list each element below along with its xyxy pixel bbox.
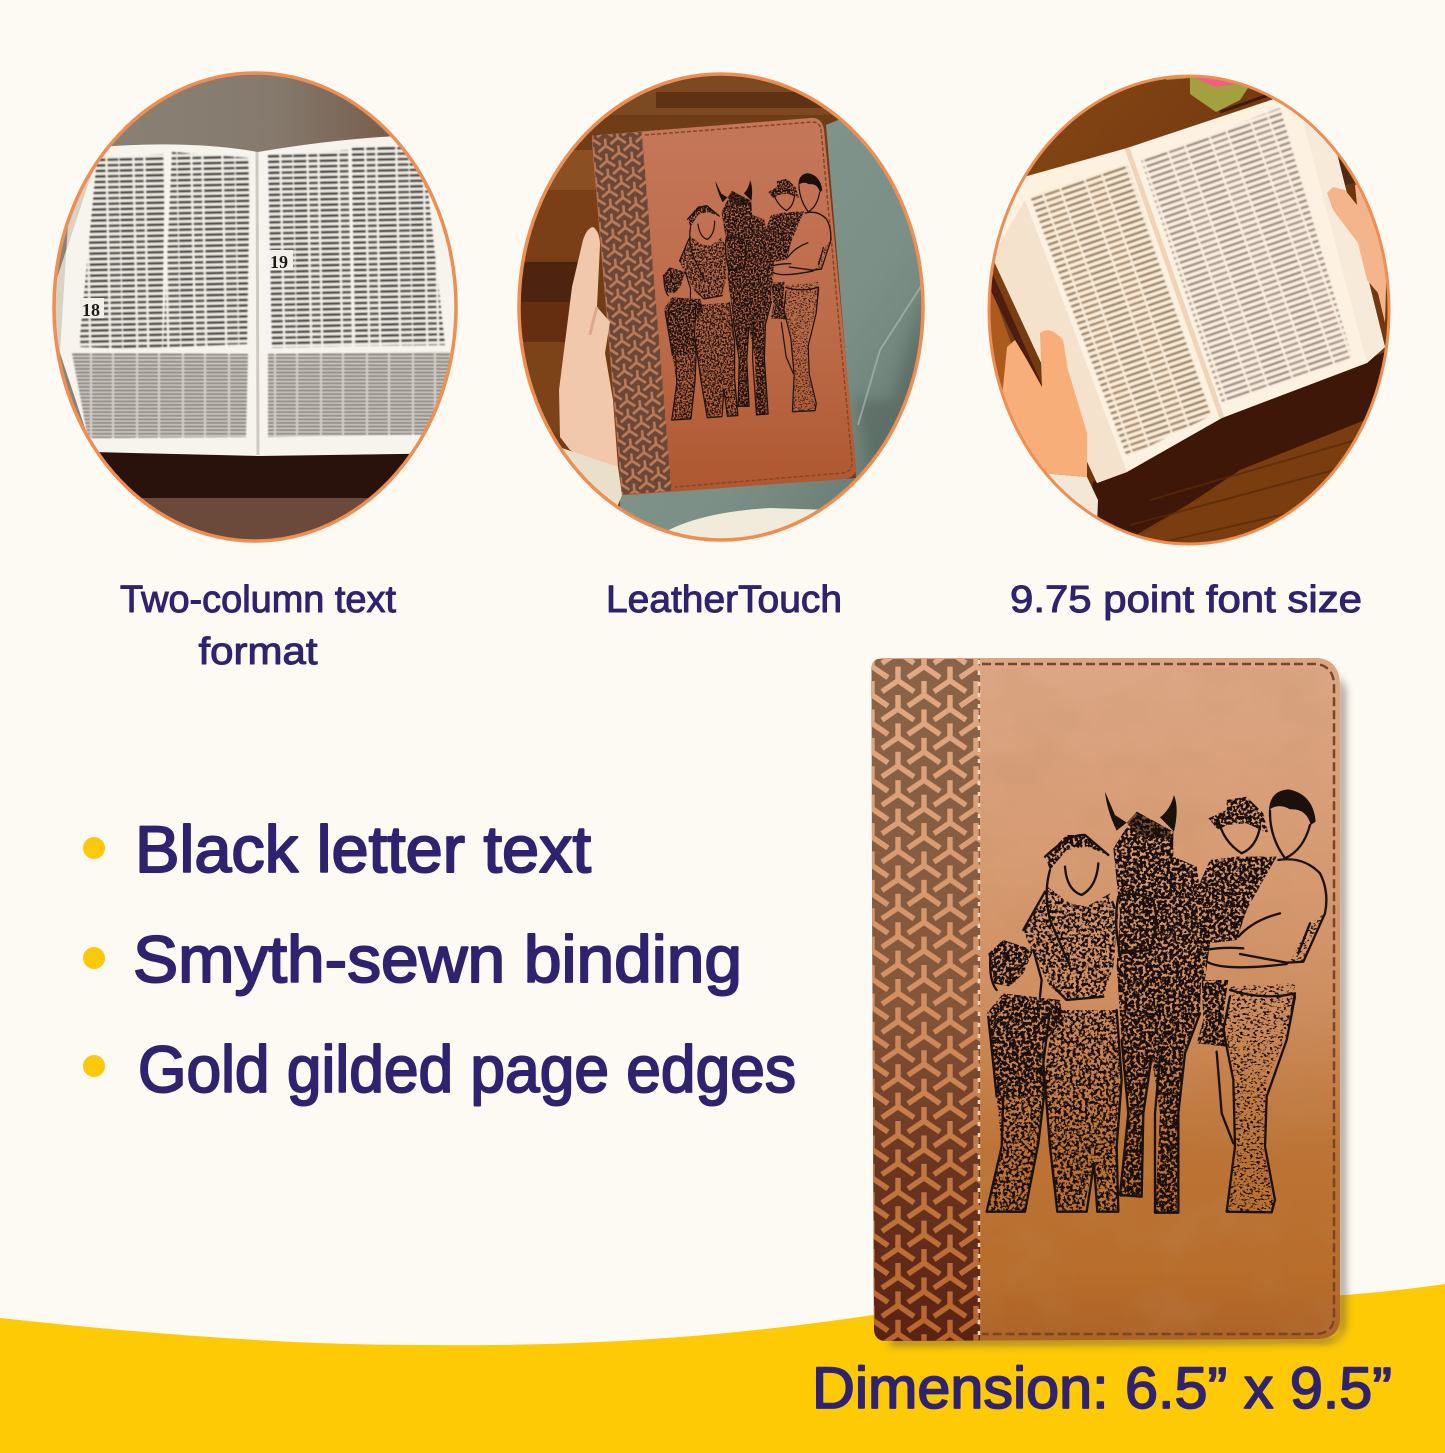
open pages: [50, 135, 470, 456]
wood planks: [520, 76, 832, 432]
bullet: smyth-sewn binding: Smyth-sewn binding: [133, 922, 742, 996]
caption: two-column text format: format: [198, 631, 318, 673]
caption: two-column text format: Two-column text: [120, 579, 396, 621]
jeans: [620, 118, 930, 560]
photo: hands holding open Bible: [985, 70, 1395, 550]
caption: LeatherTouch: LeatherTouch: [606, 579, 842, 621]
cover edge: [991, 274, 1042, 387]
knit hem: [668, 508, 818, 538]
dimension label: Dimension: 6.5” x 9.5”: [812, 1356, 1392, 1421]
sleeve cuff: [562, 448, 622, 506]
text blocks: [1030, 108, 1352, 457]
bullet: black letter text: Black letter text: [135, 812, 591, 886]
large leather Bible cover: [871, 658, 1346, 1346]
floral ornament: [1166, 78, 1248, 112]
feature list: [83, 812, 796, 1106]
photo: open Bible two-column text: 18: [82, 300, 100, 320]
hand: [559, 227, 618, 468]
book cover: [592, 118, 856, 495]
chapter numerals: [80, 298, 104, 318]
text columns: [72, 146, 450, 438]
photo: open Bible two-column text: [50, 70, 470, 553]
photo: LeatherTouch cover held in hand: [515, 70, 930, 560]
right hand: [1327, 183, 1387, 323]
yellow wave band: [0, 1284, 1445, 1453]
left hand: [1002, 330, 1087, 477]
book block: [992, 98, 1385, 483]
lace cuff: [1048, 474, 1098, 516]
caption: font size: 9.75 point font size: [1010, 579, 1362, 621]
photo: open Bible two-column text: 19: [270, 252, 288, 272]
bullet: gold gilded page edges: Gold gilded page edges: [138, 1032, 796, 1106]
